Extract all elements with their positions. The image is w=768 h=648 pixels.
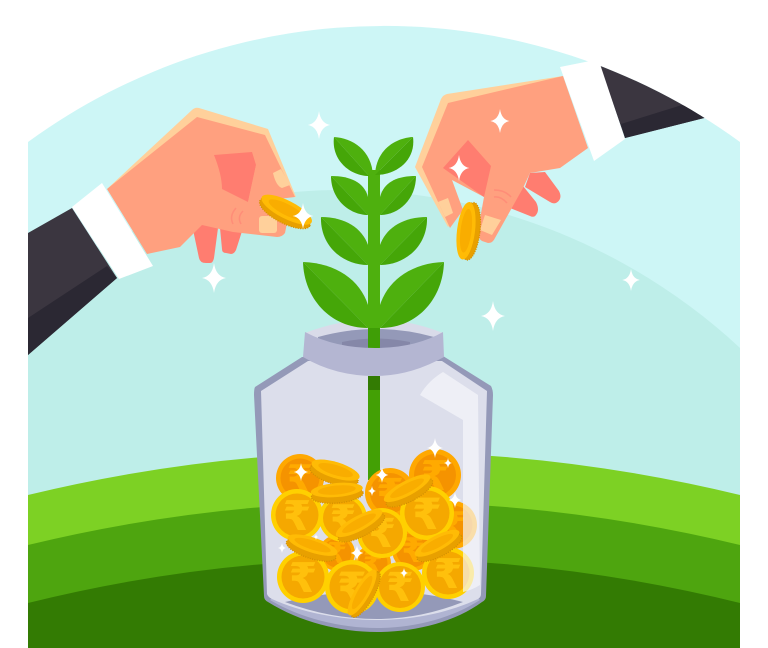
left hand with coin: [107, 108, 316, 263]
index fingernail: [273, 169, 290, 188]
tilted coin 5: [284, 530, 340, 566]
pale hill: [28, 190, 740, 495]
front coin 7: ₹: [386, 565, 414, 611]
sky: [28, 26, 740, 348]
front coin 5: [277, 551, 329, 603]
tilted coin 1: [308, 455, 362, 491]
front coin 6: ₹: [337, 564, 367, 614]
back coin 7: ₹: [401, 531, 425, 571]
mid green hill: [28, 506, 740, 603]
front coin 4: ₹: [412, 490, 442, 540]
leaf pair 4: [303, 262, 444, 328]
front coin 3: ₹: [368, 511, 396, 557]
back coin 4: [429, 501, 477, 549]
back coin 2: [409, 449, 461, 501]
jar outer edge: [254, 356, 493, 632]
back coin 6: ₹: [363, 546, 383, 580]
lower fingers: [525, 172, 560, 203]
tilted coin 3: [381, 469, 436, 512]
index finger edge: [248, 165, 272, 207]
palm shadow: [214, 152, 256, 202]
left cuff: [72, 183, 153, 279]
knuckle creases: [494, 190, 511, 203]
light green hill: [28, 456, 740, 545]
left sleeve: [28, 208, 117, 355]
tilted coin 2: [310, 481, 364, 505]
palm shadow: [443, 140, 491, 197]
back coin 3: [365, 468, 415, 518]
back coin 1: ₹: [287, 457, 313, 501]
jar neck collar: [303, 332, 444, 376]
thumb nail: [259, 216, 277, 233]
front coin 1: [271, 489, 323, 541]
front coin 5: ₹: [289, 554, 317, 602]
back coin 5: [319, 535, 355, 571]
stem in jar neck: [368, 326, 380, 350]
hand outer highlight: [415, 76, 563, 227]
hand: [107, 117, 295, 254]
back coin 1: [276, 454, 324, 502]
front coin 8: ₹: [434, 550, 462, 598]
hand: [422, 76, 588, 243]
back coin 2: ₹: [421, 452, 449, 500]
jar: [254, 356, 493, 632]
back coin 5: ₹: [327, 536, 347, 570]
front coin 7: [375, 562, 425, 612]
back coin 6: [355, 545, 391, 581]
coin held in left hand: [255, 189, 316, 235]
stem inside jar: [368, 376, 380, 480]
stem: [368, 170, 380, 328]
leaf pair 1: [334, 137, 413, 176]
hand back highlight: [107, 108, 296, 197]
front coin 4: [400, 486, 454, 540]
jar glass: [261, 361, 487, 620]
coins pile: [271, 449, 477, 621]
front coin 6: [325, 560, 379, 614]
right cuff: [560, 60, 625, 161]
back coin 7: [392, 529, 434, 571]
front coin 8: [422, 547, 474, 599]
right hand with coin: [415, 76, 588, 261]
sparkles: [202, 109, 640, 578]
leaf pair 3: [321, 217, 427, 265]
jar base band: [270, 590, 480, 628]
plant: [303, 137, 444, 350]
coin held in right hand: [454, 201, 483, 261]
jar back rim: [305, 320, 443, 352]
jar inner floor: [285, 591, 463, 619]
front coin 2: ₹: [330, 497, 356, 541]
front coin 1: ₹: [283, 492, 311, 540]
tilted coin 7: [343, 566, 386, 621]
tilted coin 6: [411, 525, 465, 567]
leaf pair 2: [331, 176, 416, 215]
thumb creases: [232, 208, 243, 224]
front coin 2: [319, 494, 367, 542]
tilted coin 4: [333, 504, 388, 547]
dark green hill: [28, 559, 740, 648]
front coin 3: [357, 508, 407, 558]
back coin 3: ₹: [376, 471, 404, 517]
jar glass highlight: [420, 372, 480, 592]
back coin 4: ₹: [440, 504, 466, 548]
fingernails: [438, 198, 453, 217]
lower fingers: [192, 225, 244, 263]
right sleeve: [600, 66, 704, 138]
